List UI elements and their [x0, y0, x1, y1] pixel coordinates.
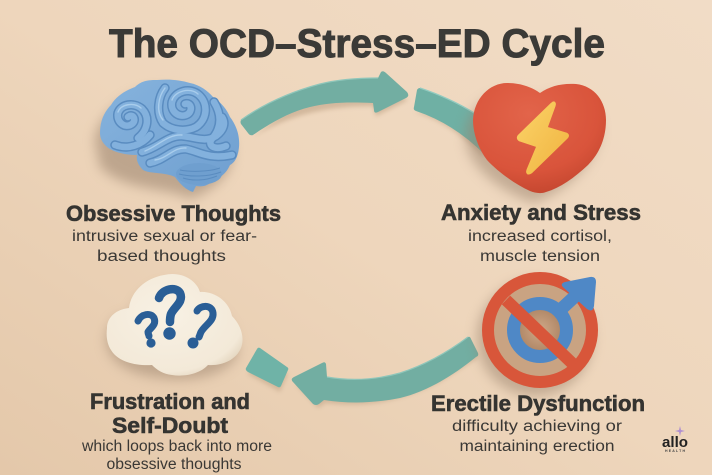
icon: heart with lightning bolt: [466, 83, 606, 203]
label: erectile dysfunction: difficulty achieving or: [452, 418, 622, 435]
icon: cloud with question marks: [106, 274, 243, 379]
label: erectile dysfunction: Erectile Dysfunction: [431, 391, 645, 416]
label: erectile dysfunction: maintaining erection: [460, 438, 614, 455]
label: obsessive thoughts: based thoughts: [97, 248, 226, 265]
cerebellum: [176, 163, 222, 185]
inner backdrop: [492, 282, 588, 378]
icon: brain: [95, 80, 239, 199]
arrow: segment entering the heart: [414, 88, 490, 156]
brain outline: [100, 80, 239, 192]
label: frustration and self-doubt: Frustration and: [90, 389, 250, 414]
icon: prohibited male symbol: [477, 277, 596, 396]
label: obsessive thoughts: [66, 201, 281, 265]
label: obsessive thoughts: Obsessive Thoughts: [66, 201, 281, 226]
arrow: dysfunction to frustration: [292, 337, 478, 408]
label: anxiety and stress: increased cortisol,: [468, 228, 612, 245]
label: anxiety and stress: [441, 200, 641, 265]
brain folds: [115, 88, 232, 163]
logo: allo health: allo: [662, 434, 688, 451]
label: anxiety and stress: Anxiety and Stress: [441, 200, 641, 225]
label: frustration and self-doubt: [81, 389, 272, 473]
male symbol arrow: [558, 288, 584, 312]
label: frustration and self-doubt: which loops back into more: [81, 438, 272, 455]
prohibition slash: [506, 300, 574, 365]
title: The OCD–Stress–ED Cycle: [109, 22, 605, 66]
logo: allo health: HEALTH: [665, 449, 685, 453]
heart: [473, 83, 606, 193]
arrow: obsessive thoughts to anxiety: [240, 71, 408, 137]
label: frustration and self-doubt: Self-Doubt: [112, 413, 229, 438]
lightning bolt: [518, 103, 568, 173]
label: frustration and self-doubt: obsessive thoughts: [106, 456, 242, 473]
arrow: segment leaving the cloud: [246, 348, 288, 392]
male symbol ring: [514, 304, 566, 356]
cloud: [107, 274, 243, 376]
logo: allo health: [662, 426, 688, 453]
label: anxiety and stress: muscle tension: [480, 248, 600, 265]
label: obsessive thoughts: intrusive sexual or fear-: [72, 228, 257, 245]
question marks: [138, 289, 213, 337]
label: erectile dysfunction: [431, 391, 645, 455]
prohibition ring: [488, 278, 592, 382]
